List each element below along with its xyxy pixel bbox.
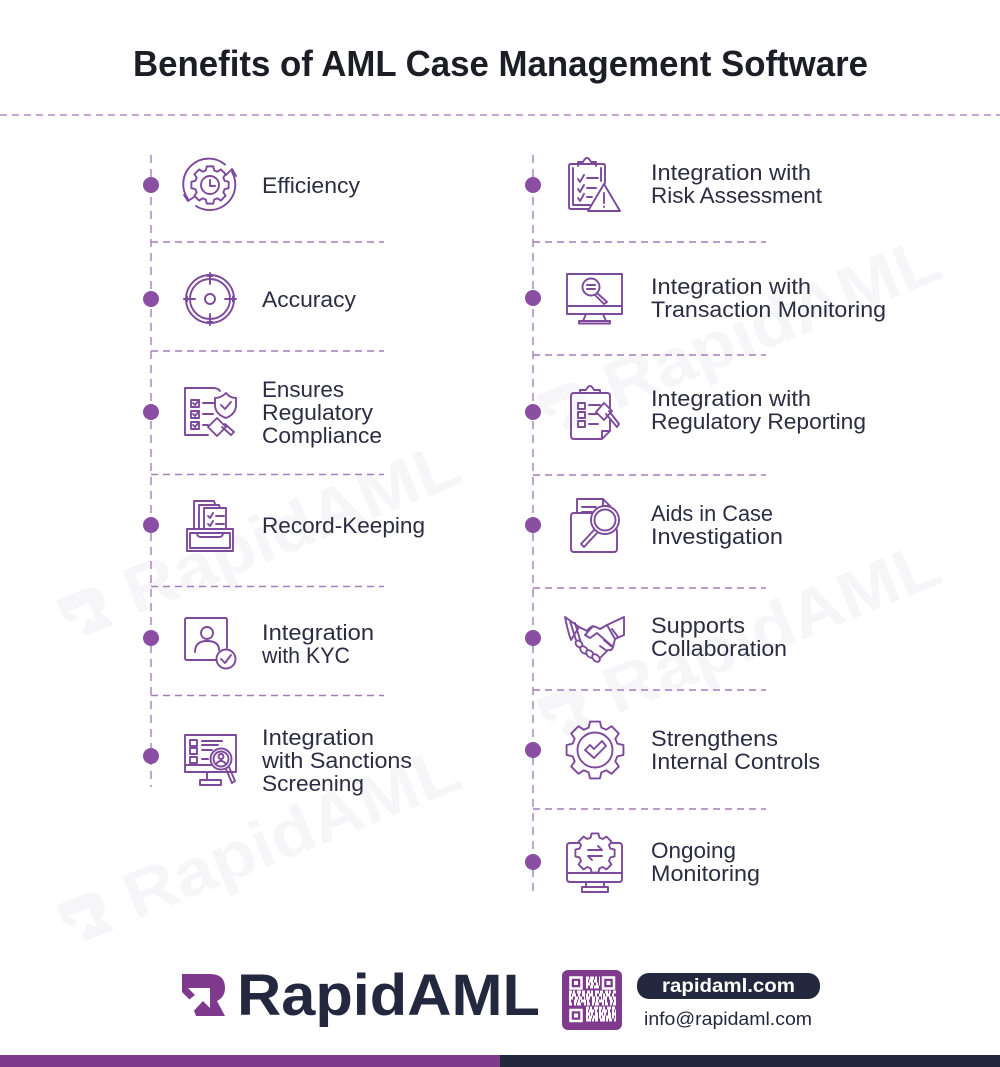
title: Benefits of AML Case Management Software — [133, 43, 868, 84]
label — [651, 160, 822, 208]
label: Strengthens — [651, 726, 778, 751]
icon: clipboard with gavel — [571, 386, 619, 439]
icon: handshake — [565, 617, 624, 663]
item: Ensures Regulatory Compliance — [143, 377, 382, 448]
website pill — [637, 973, 820, 999]
icon: gear with check — [567, 722, 623, 778]
watermarks — [48, 221, 950, 959]
label: Risk Assessment — [651, 183, 822, 208]
icon: target crosshair — [184, 273, 236, 325]
icon: file tray — [187, 501, 233, 551]
icon: monitor with search — [567, 274, 622, 324]
icon: document with shield and gavel — [185, 388, 236, 436]
label: Regulatory — [262, 400, 373, 425]
label — [651, 838, 760, 886]
item: Integration with Regulatory Reporting — [525, 386, 866, 439]
watermarks: RapidAML — [593, 221, 950, 423]
label: Integration — [262, 725, 374, 750]
label: Integration with — [651, 386, 811, 411]
item: Record-Keeping — [143, 501, 425, 551]
label — [651, 726, 820, 774]
QR code — [562, 970, 622, 1030]
label — [261, 725, 412, 796]
label — [651, 613, 787, 661]
label: Ongoing — [651, 838, 736, 863]
label: Accuracy — [262, 287, 356, 312]
label: Efficiency — [262, 173, 360, 198]
watermarks: RapidAML — [113, 731, 470, 933]
label — [651, 274, 886, 322]
label: Compliance — [262, 423, 382, 448]
label — [262, 377, 382, 448]
item: Supports Collaboration — [525, 613, 787, 663]
label: Integration with — [651, 160, 811, 185]
label: Aids in Case — [651, 501, 773, 526]
icon: profile with check — [185, 618, 236, 668]
label: Monitoring — [651, 861, 760, 886]
label: with KYC — [261, 643, 350, 668]
item: Integration with Sanctions Screening — [143, 725, 412, 796]
label: with Sanctions — [261, 748, 412, 773]
label: Supports — [651, 613, 745, 638]
item: Efficiency — [143, 159, 360, 210]
label: Collaboration — [651, 636, 787, 661]
panel: left benefits column — [143, 155, 425, 796]
item: Integration with Transaction Monitoring — [525, 274, 886, 324]
item: Ongoing Monitoring — [525, 833, 760, 892]
item: Integration with Risk Assessment — [525, 158, 822, 211]
icon: gear with clock and cycle arrows — [183, 159, 236, 210]
label: Regulatory Reporting — [651, 409, 866, 434]
icon: clipboard with warning triangle — [569, 158, 620, 211]
label: Investigation — [651, 524, 783, 549]
watermarks: RapidAML — [113, 426, 470, 628]
website pill: rapidaml.com — [662, 976, 795, 997]
label: Screening — [262, 771, 364, 796]
label — [651, 501, 783, 549]
item: Integration with KYC — [143, 618, 374, 668]
item: Strengthens Internal Controls — [525, 722, 820, 778]
watermarks: RapidAML — [593, 526, 950, 728]
footer — [0, 963, 1000, 1067]
label: Ensures — [262, 377, 344, 402]
bottom colour bar — [0, 1055, 1000, 1067]
email: info@rapidaml.com — [644, 1009, 812, 1029]
panel: right benefits column — [525, 155, 886, 892]
label: Record-Keeping — [262, 513, 425, 538]
item: Accuracy — [143, 273, 356, 325]
logo wordmark: RapidAML — [237, 963, 540, 1028]
label — [261, 620, 374, 668]
label: Integration — [262, 620, 374, 645]
icon: RapidAML logo mark — [180, 974, 225, 1016]
label: Transaction Monitoring — [651, 297, 886, 322]
icon: monitor with gear — [567, 833, 622, 892]
icon: folder with magnifier — [571, 499, 619, 552]
label: Integration with — [651, 274, 811, 299]
icon: monitor with magnifier — [185, 735, 236, 785]
label: Internal Controls — [651, 749, 820, 774]
label — [651, 386, 866, 434]
item: Aids in Case Investigation — [525, 499, 783, 552]
